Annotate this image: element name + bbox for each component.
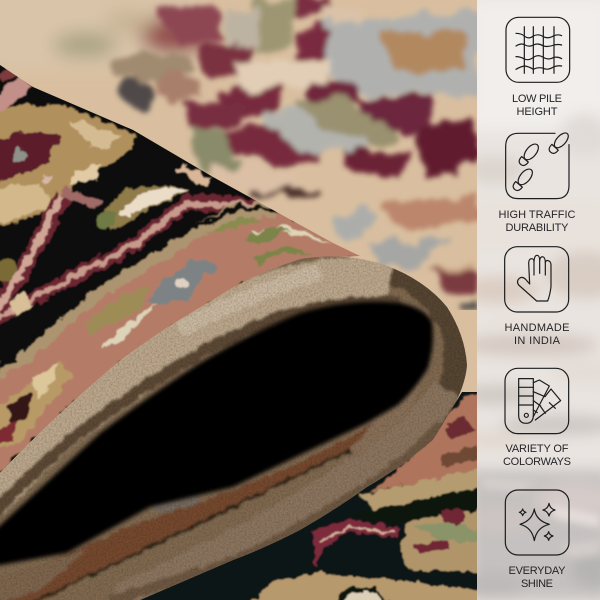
label: everyday shine: EVERYDAY (508, 565, 566, 577)
frosted panel background (477, 0, 600, 600)
icon: sparkles (505, 490, 569, 555)
label: high traffic durability (498, 209, 576, 234)
rolled pile edge and woven back (0, 256, 467, 600)
feature: variety of colorways (503, 368, 571, 468)
label: low pile height (512, 93, 562, 118)
label: handmade in india: IN INDIA (514, 335, 561, 347)
woven tan band (120, 390, 448, 600)
label: handmade in india (504, 322, 570, 347)
label: low pile height: HEIGHT (516, 106, 558, 118)
label: everyday shine: SHINE (521, 578, 553, 590)
band ornaments (0, 218, 330, 450)
cream pile band (0, 280, 390, 500)
label: handmade in india: HANDMADE (504, 322, 570, 334)
feature: high traffic durability (498, 131, 576, 234)
label: everyday shine (508, 565, 566, 590)
flat rug in the foreground (130, 385, 490, 600)
cream leaf (96, 184, 190, 232)
rolled rug face (0, 65, 360, 473)
label: variety of colorways (503, 443, 571, 468)
icon: woven pile (506, 17, 570, 82)
label: variety of colorways: VARIETY OF (506, 443, 569, 455)
icon: footprints (506, 131, 571, 199)
icon: colour fan deck (505, 368, 569, 434)
label: variety of colorways: COLORWAYS (503, 456, 571, 468)
rust stripe on back (0, 423, 375, 600)
feature: handmade in india (504, 247, 570, 347)
label: high traffic durability: HIGH TRAFFIC (498, 209, 576, 221)
gold medallion (0, 104, 137, 228)
rust border (370, 390, 490, 492)
pink stripes (0, 68, 272, 320)
icon: hand (505, 247, 569, 312)
label: low pile height: LOW PILE (512, 93, 562, 105)
pile texture (0, 250, 480, 600)
label: high traffic durability: DURABILITY (506, 222, 569, 234)
feature: everyday shine (505, 490, 569, 590)
blurred rug field in background (0, 0, 480, 338)
feature: low pile height (506, 17, 570, 118)
dark underside of the fold (0, 302, 433, 566)
ornaments (400, 508, 490, 572)
rust border band (0, 207, 370, 480)
fold edge (392, 270, 459, 440)
panel: product features (477, 0, 600, 600)
